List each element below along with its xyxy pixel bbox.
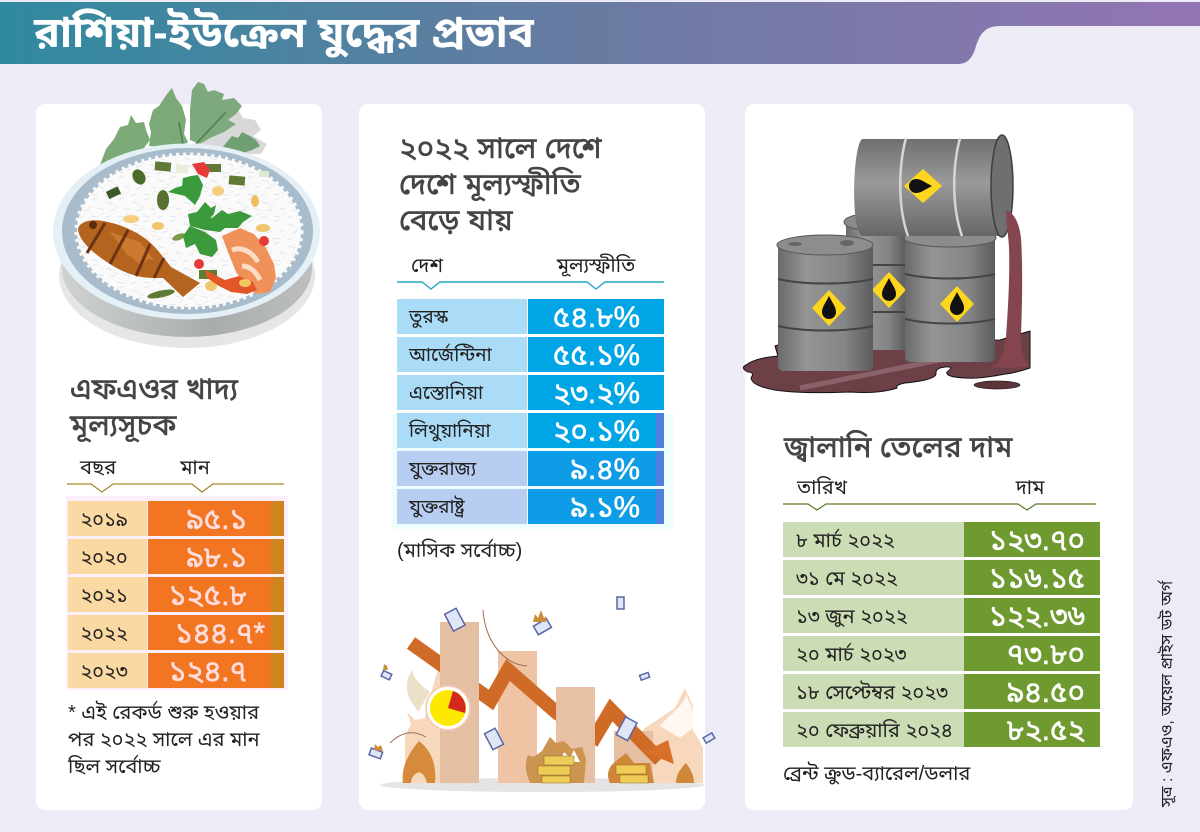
inflation heading: দেশে মূল্যস্ফীতি: [399, 168, 581, 201]
row Turkey: [397, 299, 664, 334]
title: রাশিয়া-ইউক্রেন যুদ্ধের প্রভাব: [34, 9, 534, 57]
food index column labels: মান: [180, 457, 210, 479]
thin arcs: [390, 610, 527, 743]
row 2022: [68, 615, 284, 650]
vegetables: [106, 161, 270, 300]
table halo: [392, 414, 673, 529]
row 31 May 2022: [783, 560, 1100, 595]
row 2021: ২০২১: [80, 585, 128, 607]
row Lithuania: [397, 413, 664, 448]
row 20 February 2024: ২০ ফেব্রুয়ারি ২০২৪: [796, 720, 953, 742]
illustration: plate of rice with fish: [53, 82, 320, 348]
footnote: * এই রেকর্ড শুরু হওয়ার: [68, 702, 259, 724]
row 2019: ৯৫.১: [186, 503, 247, 536]
food index heading: মূল্যসূচক: [70, 409, 176, 442]
row 31 May 2022: ১১৬.১৫: [989, 562, 1085, 595]
row 2022: ২০২২: [80, 623, 128, 645]
row 2022: ১৪৪.৭*: [175, 617, 265, 650]
row Estonia: এস্তোনিয়া: [409, 383, 483, 404]
inflation heading: [399, 132, 602, 237]
panel: food price index: [36, 104, 322, 810]
inflation heading: বেড়ে যায়: [399, 204, 513, 237]
inflation column labels: মূল্যস্ফীতি: [557, 255, 635, 277]
food index heading: [69, 373, 238, 443]
row 20 March 2023: ৭৩.৮০: [1007, 638, 1085, 671]
back barrel: [844, 213, 908, 350]
row 2021: ১২৫.৮: [169, 579, 247, 612]
row UK: ৯.৪%: [570, 453, 640, 486]
fuel column labels: [783, 476, 1096, 511]
row 13 June 2022: ১৩ জুন ২০২২: [796, 606, 907, 628]
row 20 February 2024: ৮২.৫২: [1007, 714, 1085, 747]
food index column labels: বছর: [80, 457, 116, 479]
inflation column labels: [397, 254, 664, 290]
row Argentina: ৫৫.১%: [553, 339, 640, 372]
panel: inflation: [359, 104, 705, 810]
row 8 March 2022: ১২৩.৭০: [989, 524, 1085, 557]
falling arrow: [411, 643, 660, 760]
cilantro: [168, 175, 252, 257]
illustration: oil barrels and spill: [742, 134, 1030, 394]
table: inflation: [397, 299, 664, 524]
food index heading: এফএওর খাদ্য: [70, 373, 238, 406]
row UK: যুক্তরাজ্য: [409, 459, 476, 480]
row USA: যুক্তরাষ্ট্র: [409, 497, 465, 518]
row 13 June 2022: [783, 598, 1100, 633]
pie chart: [426, 686, 470, 730]
row 20 March 2023: [783, 636, 1100, 671]
row 31 May 2022: ৩১ মে ২০২২: [796, 568, 898, 590]
row 2023: [68, 653, 284, 688]
row 2020: ২০২০: [80, 547, 128, 569]
coins: [538, 756, 648, 783]
money notes: [369, 597, 715, 759]
left barrel: [777, 235, 873, 371]
table halo: [66, 496, 288, 690]
fish: [78, 220, 200, 297]
row Argentina: [397, 337, 664, 372]
row 2020: ৯৮.১: [186, 541, 247, 574]
footnote: পর ২০২২ সালে এর মান: [68, 729, 260, 751]
background flames: [405, 666, 703, 783]
small flames on notes: [374, 610, 546, 751]
row 2019: ২০১৯: [80, 509, 128, 531]
table: fuel oil price: [783, 522, 1100, 747]
bars behind arrow: [498, 651, 537, 783]
rice: [77, 155, 301, 307]
row Lithuania: লিথুয়ানিয়া: [409, 421, 491, 442]
ground shadow: [380, 778, 704, 792]
row 8 March 2022: ৮ মার্চ ২০২২: [796, 530, 895, 552]
row 18 September 2023: ১৮ সেপ্টেম্বর ২০২৩: [796, 682, 948, 704]
row USA: ৯.১%: [570, 491, 640, 524]
row UK: [397, 451, 664, 486]
table: food price index: [68, 501, 284, 688]
row Turkey: তুরস্ক: [409, 307, 448, 328]
row 20 February 2024: [783, 712, 1100, 747]
row 2023: ২০২৩: [80, 661, 128, 683]
illustration: burning falling bar chart: [368, 596, 716, 792]
top lying barrel: [854, 135, 1013, 237]
row Estonia: [397, 375, 664, 410]
row 18 September 2023: [783, 674, 1100, 709]
header banner: [0, 2, 1200, 64]
right barrel: [904, 229, 996, 362]
fuel note: ব্রেন্ট ক্রুড-ব্যারেল/ডলার: [783, 763, 970, 785]
row 2023: ১২৪.৭: [169, 655, 247, 688]
tall bars in front: [440, 622, 479, 783]
row USA: [397, 489, 664, 524]
leaves: [100, 82, 267, 168]
row 8 March 2022: [783, 522, 1100, 557]
row 13 June 2022: ১২২.৩৬: [989, 600, 1085, 633]
row 2020: [68, 539, 284, 574]
panel: fuel oil price: [745, 104, 1133, 810]
inflation column labels: দেশ: [411, 255, 443, 277]
plate rim: [53, 144, 320, 320]
row 18 September 2023: ৯৪.৫০: [1007, 676, 1085, 709]
fuel column labels: তারিখ: [797, 477, 847, 499]
footnote: [68, 700, 260, 778]
row Turkey: ৫৪.৮%: [553, 301, 640, 334]
inflation note: (মাসিক সর্বোচ্চ): [397, 540, 522, 562]
shrimp: [194, 228, 276, 294]
row Lithuania: ২০.১%: [553, 415, 640, 448]
footnote: ছিল সর্বোচ্চ: [68, 756, 161, 778]
row 2021: [68, 577, 284, 612]
oil spill: [743, 331, 1030, 393]
row Argentina: আর্জেন্টিনা: [409, 345, 492, 366]
flames: [403, 741, 435, 783]
inflation heading: ২০২২ সালে দেশে: [399, 132, 602, 165]
food index column labels: [67, 457, 284, 493]
row 2019: [68, 501, 284, 536]
fuel heading: জ্বালানি তেলের দাম: [784, 431, 1012, 464]
source note (vertical): সূত্র : এফএও, অয়েল প্রাইস ডট অর্গ: [1159, 581, 1176, 807]
plate shadow and bowl: [59, 202, 315, 348]
fuel column labels: দাম: [1016, 477, 1044, 499]
row Estonia: ২৩.২%: [553, 377, 640, 410]
row 20 March 2023: ২০ মার্চ ২০২৩: [796, 644, 906, 666]
oil stream: [990, 210, 1030, 368]
